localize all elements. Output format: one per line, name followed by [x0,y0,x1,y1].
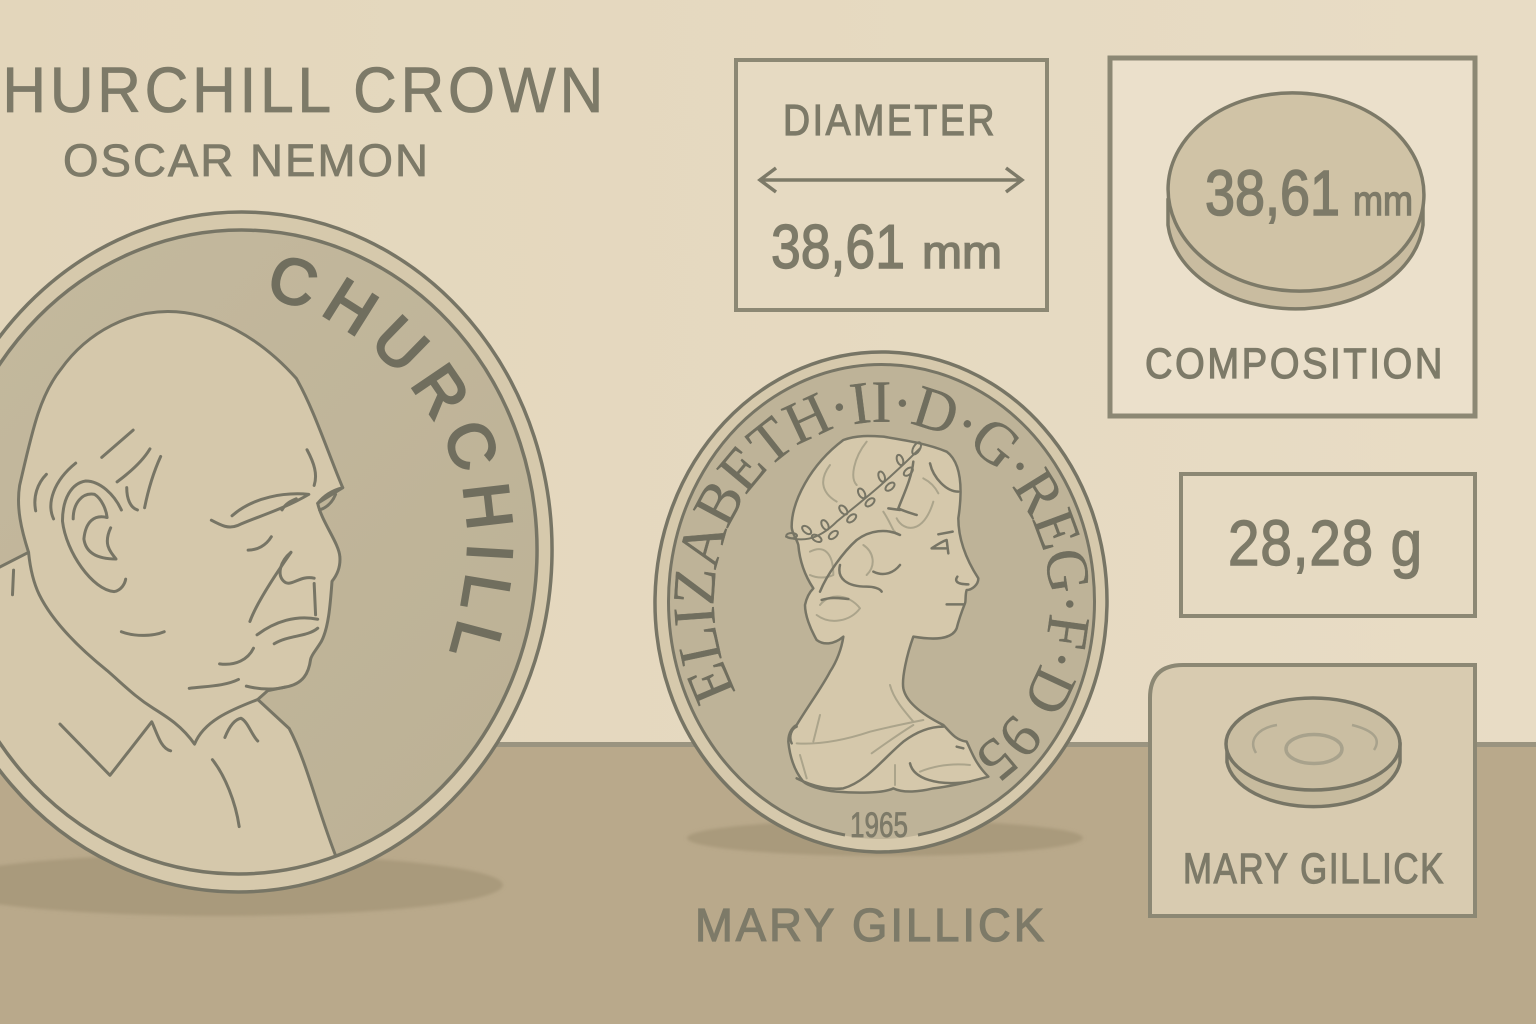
queen portrait [786,436,988,793]
panel: weight [1181,474,1475,616]
drapery [790,727,970,789]
coin face [0,220,548,884]
heading: composition: COMPOSITION [1145,340,1445,388]
big coin: Churchill [0,210,554,894]
hair ticks [35,430,161,519]
heading: diameter: DIAMETER [783,96,997,145]
collar [60,718,258,827]
portrait [0,312,343,914]
inner ring with year gap [668,365,1094,835]
background wall [0,0,1536,744]
coin lettering: CHURCHILL: CHURCHILL [272,258,514,653]
coin face [664,361,1098,843]
value: weight: 28,28 g [1228,507,1423,579]
eye, nose and mouth [932,532,968,604]
coin year: 1965 [850,806,908,845]
bust silhouette [788,436,988,793]
unit: composition: mm [1353,177,1413,224]
panel: diameter [736,60,1047,310]
shadow: big coin [0,854,503,916]
panel: composition [1110,58,1475,416]
nose [280,552,316,615]
small coin: Elizabeth II [653,350,1109,854]
ear [62,481,126,592]
icon: coin disc [1163,86,1429,309]
value: diameter: 38,61 [771,213,905,282]
floor [0,744,1536,1024]
neck and jaw lines [29,552,258,744]
inner ring [0,220,548,884]
panel: Mary Gillick coin [1150,665,1475,916]
head silhouette [0,312,343,914]
light hair and drapery lines [797,442,970,785]
shadow: small coin [687,820,1083,856]
hair lines [888,462,958,515]
eye and brow [211,450,343,550]
unit: diameter: mm [922,226,1002,278]
wreath [786,441,923,544]
value: composition: 38,61 [1205,157,1340,229]
label: Mary Gillick: MARY GILLICK [695,899,1047,951]
mouth and cheek [121,552,318,689]
coin lettering: legend: ELIZABETH·II·D·G·REG·F·D 95 [674,382,1090,781]
subtitle: OSCAR NEMON [63,135,430,186]
heading: Mary Gillick: MARY GILLICK [1183,845,1445,893]
coin rim [651,348,1111,856]
arrow: double-headed [760,168,1022,192]
coin rim [0,201,564,903]
icon: small coin [1226,698,1400,807]
